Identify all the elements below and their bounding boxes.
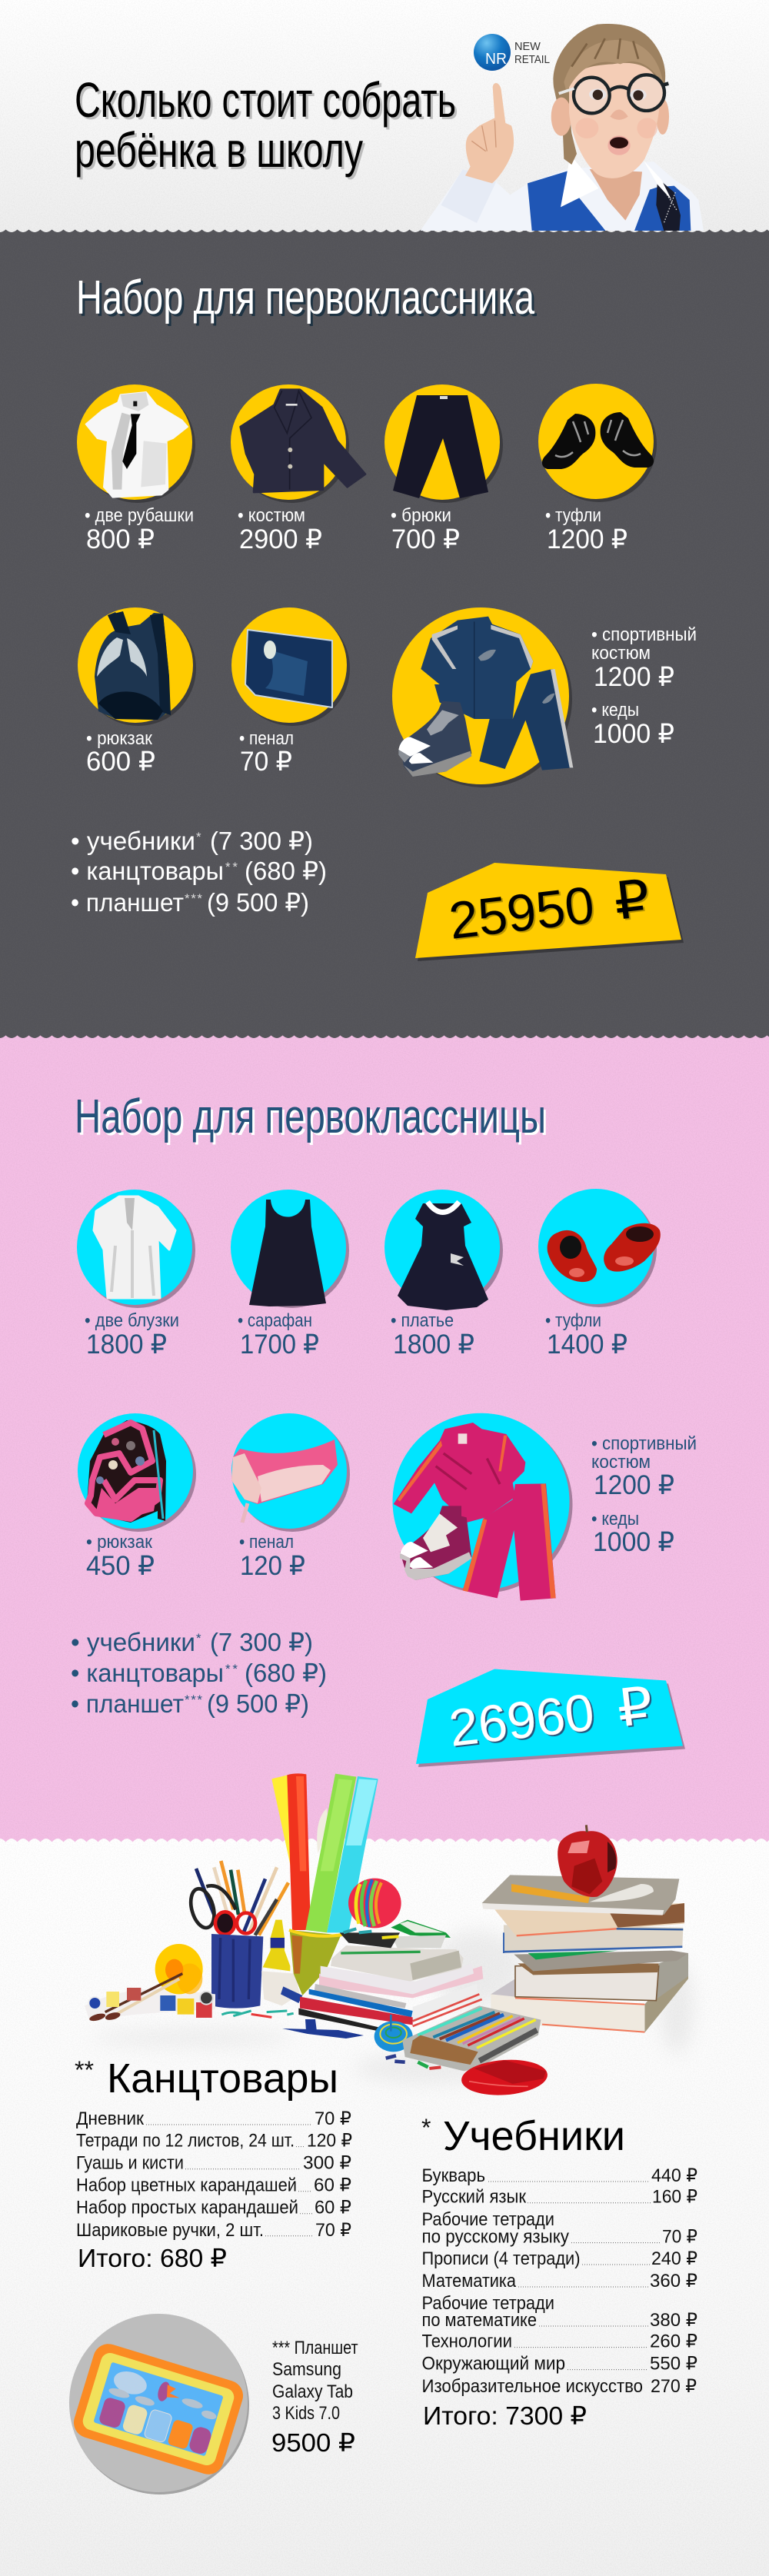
caption: tablet: Samsung	[272, 2359, 341, 2380]
gold cup and notebooks	[289, 1920, 483, 2032]
illustration: school supplies	[85, 1773, 694, 2098]
rows: Гуашь и кисти	[76, 2153, 184, 2174]
heading: stationery: Канцтовары	[107, 2055, 338, 2102]
item: pink tracksuit and sneakers: • кеды	[591, 1509, 639, 1529]
panel: stationery list	[75, 2055, 352, 2272]
item: pencil case: • пенал	[239, 728, 294, 749]
list: additional costs: **	[225, 860, 238, 874]
rows: Технологии	[421, 2331, 512, 2352]
item: pink pencil case: • пенал	[239, 1532, 294, 1553]
total: textbooks: Итого: 7300 ₽	[423, 2401, 587, 2430]
list: additional costs: • канцтовары	[71, 857, 224, 885]
rows: 240 ₽	[651, 2248, 697, 2269]
rows: Набор простых карандашей	[76, 2198, 298, 2218]
caption: tablet: 9500 ₽	[271, 2428, 355, 2457]
caption: tablet: *** Планшет	[272, 2338, 358, 2358]
list: additional costs: **	[225, 1662, 238, 1676]
item: red shoes: • туфли	[545, 1310, 601, 1331]
rows: 160 ₽	[652, 2187, 697, 2208]
tape, glue and brushes	[85, 1920, 302, 2022]
logo: New Retail: RETAIL	[514, 54, 550, 66]
item: dress	[384, 1190, 503, 1360]
item: pink backpack: • рюкзак	[86, 1532, 152, 1553]
item: pink backpack	[78, 1413, 196, 1581]
rows: Рабочие тетради	[421, 2293, 554, 2314]
item: two shirts: 800 ₽	[86, 524, 155, 554]
total: boy set: ₽	[611, 869, 653, 931]
item: trousers	[384, 384, 503, 554]
rows: Тетради по 12 листов, 24 шт.	[76, 2131, 295, 2152]
heading: textbooks: *	[421, 2114, 431, 2142]
rows: Набор цветных карандашей	[76, 2175, 297, 2196]
item: backpack: 600 ₽	[86, 747, 155, 777]
item: backpack	[78, 607, 196, 777]
item: pinafore: • сарафан	[238, 1310, 312, 1331]
rows: 70 ₽	[662, 2227, 697, 2248]
title	[75, 72, 456, 178]
rows: Окружающий мир	[421, 2354, 565, 2375]
panel: first-grade boy set	[71, 271, 697, 961]
list: additional costs: (680 ₽)	[245, 1659, 327, 1687]
item: tracksuit and sneakers	[392, 607, 697, 787]
list: additional costs	[71, 827, 327, 917]
item: dress: 1800 ₽	[393, 1330, 474, 1360]
panel: textbooks list	[421, 2113, 697, 2430]
rows: 70 ₽	[315, 2220, 351, 2241]
caption: tablet: Galaxy Tab	[272, 2381, 353, 2402]
item: two shirts	[77, 384, 195, 554]
list: additional costs: (7 300 ₽)	[210, 827, 313, 855]
list: additional costs: (7 300 ₽)	[210, 1628, 313, 1656]
rows: 120 ₽	[307, 2131, 352, 2152]
item: backpack: • рюкзак	[86, 728, 152, 749]
item: pinafore	[231, 1190, 349, 1360]
rows: 300 ₽	[303, 2153, 351, 2174]
item: pink tracksuit and sneakers: 1000 ₽	[593, 1527, 674, 1557]
title: ребёнка в школу	[75, 122, 363, 178]
item: pink tracksuit and sneakers: костюм	[591, 1452, 651, 1473]
compass	[282, 2019, 364, 2039]
rows: 260 ₽	[650, 2331, 697, 2352]
item: two blouses	[77, 1190, 195, 1360]
list: additional costs: *	[196, 1631, 201, 1646]
item: pencil case: 70 ₽	[240, 747, 292, 777]
list: additional costs: (680 ₽)	[245, 857, 327, 885]
list: additional costs: • планшет	[71, 888, 184, 917]
rows: Дневник	[76, 2108, 144, 2129]
rows: 550 ₽	[650, 2354, 697, 2375]
logo: New Retail	[474, 34, 550, 71]
panel: first-grade girl set	[71, 1090, 697, 1767]
list: additional costs: (9 500 ₽)	[207, 888, 309, 917]
rows: Математика	[421, 2271, 517, 2291]
logo: New Retail: NEW	[514, 41, 541, 53]
item: tracksuit and sneakers: • спортивный	[591, 624, 697, 645]
heading: textbooks: Учебники	[443, 2113, 625, 2159]
rows: Шариковые ручки, 2 шт.	[76, 2220, 264, 2241]
total: stationery: Итого: 680 ₽	[78, 2244, 227, 2272]
logo: New Retail: NR	[485, 51, 507, 68]
item: pink tracksuit and sneakers: • спортивный	[591, 1433, 697, 1454]
total: girl set: 26960	[446, 1683, 598, 1758]
list: additional costs: ***	[185, 891, 202, 906]
total: boy set: 25950	[446, 876, 598, 950]
rows: 380 ₽	[650, 2310, 697, 2331]
list: additional costs: • учебники	[71, 827, 195, 855]
rows: 60 ₽	[315, 2198, 351, 2218]
rows: 270 ₽	[651, 2376, 697, 2397]
item: two blouses: • две блузки	[85, 1310, 179, 1331]
item: red shoes: 1400 ₽	[547, 1330, 628, 1360]
total: boy set	[415, 863, 684, 961]
icon: tablet in circle	[69, 2314, 249, 2494]
list: additional costs: • канцтовары	[71, 1659, 224, 1687]
rows: Изобразительное искусство	[421, 2376, 643, 2397]
total: girl set: ₽	[614, 1676, 656, 1739]
item: suit: • костюм	[238, 505, 305, 526]
item: suit	[231, 384, 365, 554]
item: dress: • платье	[391, 1310, 454, 1331]
caption: tablet: 3 Kids 7.0	[272, 2403, 340, 2424]
item: shoes	[538, 384, 657, 554]
item: pencil case	[231, 607, 350, 777]
header	[75, 24, 704, 231]
soft shadows	[92, 1930, 694, 2084]
list: additional costs: • учебники	[71, 1628, 195, 1656]
item: shoes: • туфли	[545, 505, 601, 526]
list: additional costs: (9 500 ₽)	[207, 1689, 309, 1718]
rows	[421, 2165, 697, 2397]
item: pink pencil case	[231, 1413, 350, 1581]
item: tracksuit and sneakers: 1000 ₽	[593, 719, 674, 749]
item: tracksuit and sneakers: • кеды	[591, 700, 639, 721]
item: pink tracksuit and sneakers	[392, 1413, 697, 1601]
list: additional costs: *	[196, 830, 201, 844]
illustration: surprised boy	[421, 24, 704, 231]
panel: tablet	[69, 2314, 358, 2494]
item: shoes: 1200 ₽	[547, 524, 628, 554]
list: additional costs	[71, 1628, 327, 1718]
rows: 440 ₽	[651, 2165, 697, 2186]
item: pink tracksuit and sneakers: 1200 ₽	[594, 1470, 674, 1500]
heading: stationery: **	[75, 2056, 94, 2084]
rows: 60 ₽	[314, 2175, 351, 2196]
list: additional costs: ***	[185, 1692, 202, 1707]
item: two blouses: 1800 ₽	[86, 1330, 167, 1360]
item: trousers: • брюки	[391, 505, 451, 526]
rows: Прописи (4 тетради)	[421, 2248, 580, 2269]
rows: Русский язык	[421, 2187, 526, 2208]
book stack with apple	[482, 1825, 688, 2032]
rows: Рабочие тетради	[421, 2209, 554, 2230]
caption: tablet	[271, 2338, 358, 2457]
item: red shoes	[538, 1189, 661, 1360]
rows: Букварь	[421, 2165, 485, 2186]
total: girl set	[416, 1669, 685, 1767]
list: additional costs: • планшет	[71, 1689, 184, 1718]
paper rolls	[271, 1773, 378, 1932]
heading: Набор для первоклассника	[76, 271, 534, 324]
striped ball	[348, 1879, 401, 1928]
item: two shirts: • две рубашки	[85, 505, 194, 526]
pencil box, spinning top, pins and sharpener	[375, 2005, 548, 2098]
rows: 360 ₽	[650, 2271, 697, 2291]
item: pinafore: 1700 ₽	[240, 1330, 319, 1360]
item: suit: 2900 ₽	[239, 524, 322, 554]
item: trousers: 700 ₽	[391, 524, 460, 554]
item: tracksuit and sneakers: 1200 ₽	[594, 662, 674, 692]
rows	[76, 2108, 352, 2241]
rows: 70 ₽	[315, 2108, 351, 2129]
heading: Набор для первоклассницы	[75, 1090, 546, 1143]
title: Сколько стоит собрать	[75, 72, 456, 128]
item: pink backpack: 450 ₽	[86, 1551, 155, 1581]
pencil cup with pencils and scissors	[187, 1861, 288, 2009]
item: tracksuit and sneakers: костюм	[591, 643, 651, 664]
rows: по русскому языку	[421, 2227, 569, 2248]
item: pink pencil case: 120 ₽	[240, 1551, 305, 1581]
rows: по математике	[421, 2310, 537, 2331]
